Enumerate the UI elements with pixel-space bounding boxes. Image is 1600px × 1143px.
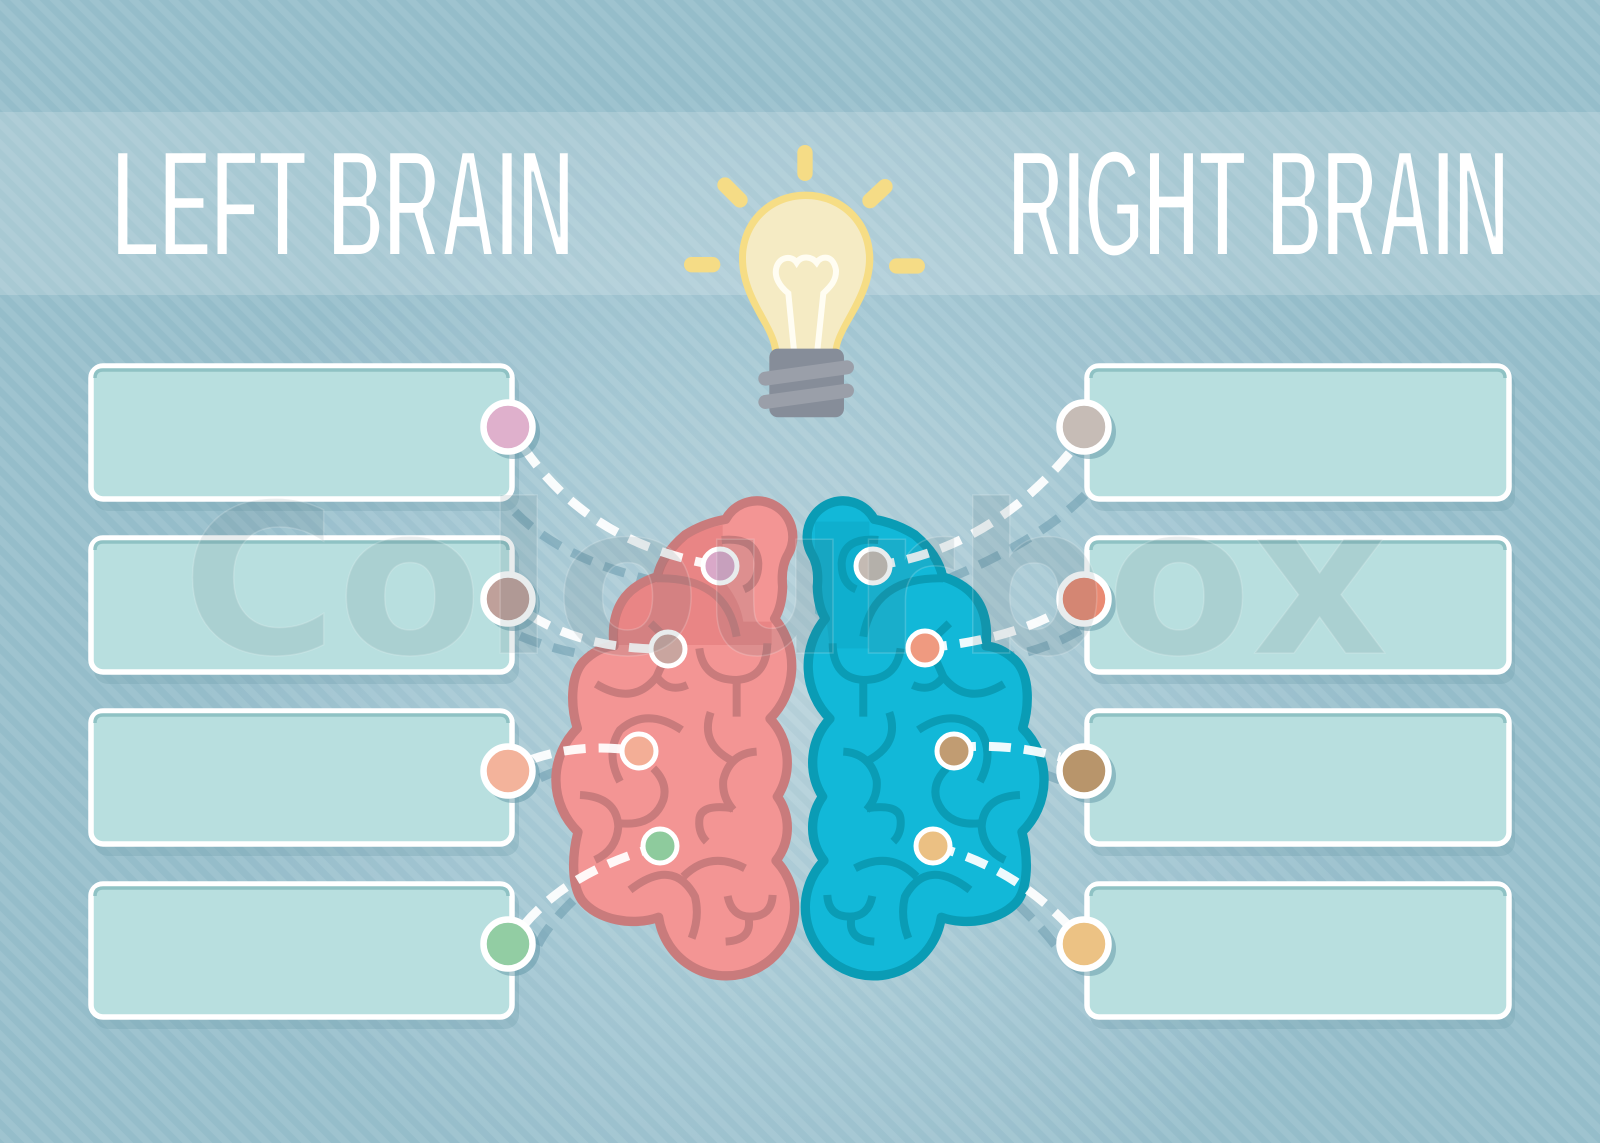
- left hemisphere of brain: [556, 501, 795, 976]
- left outer nodes: [484, 402, 540, 976]
- connector shadows: [515, 495, 1085, 945]
- nodes on left hemisphere: [622, 549, 737, 863]
- header band: [0, 112, 1600, 295]
- watermark: Colourbox: [182, 461, 1388, 703]
- text: LEFT BRAIN: [112, 116, 574, 292]
- right label boxes: [1087, 366, 1515, 1029]
- icon: light bulb: [692, 153, 917, 417]
- right hemisphere of brain: [805, 501, 1044, 976]
- left label boxes: [91, 366, 519, 1029]
- nodes on right hemisphere: [856, 549, 971, 863]
- dashed connectors: [524, 448, 1072, 925]
- right outer nodes: [1060, 402, 1116, 976]
